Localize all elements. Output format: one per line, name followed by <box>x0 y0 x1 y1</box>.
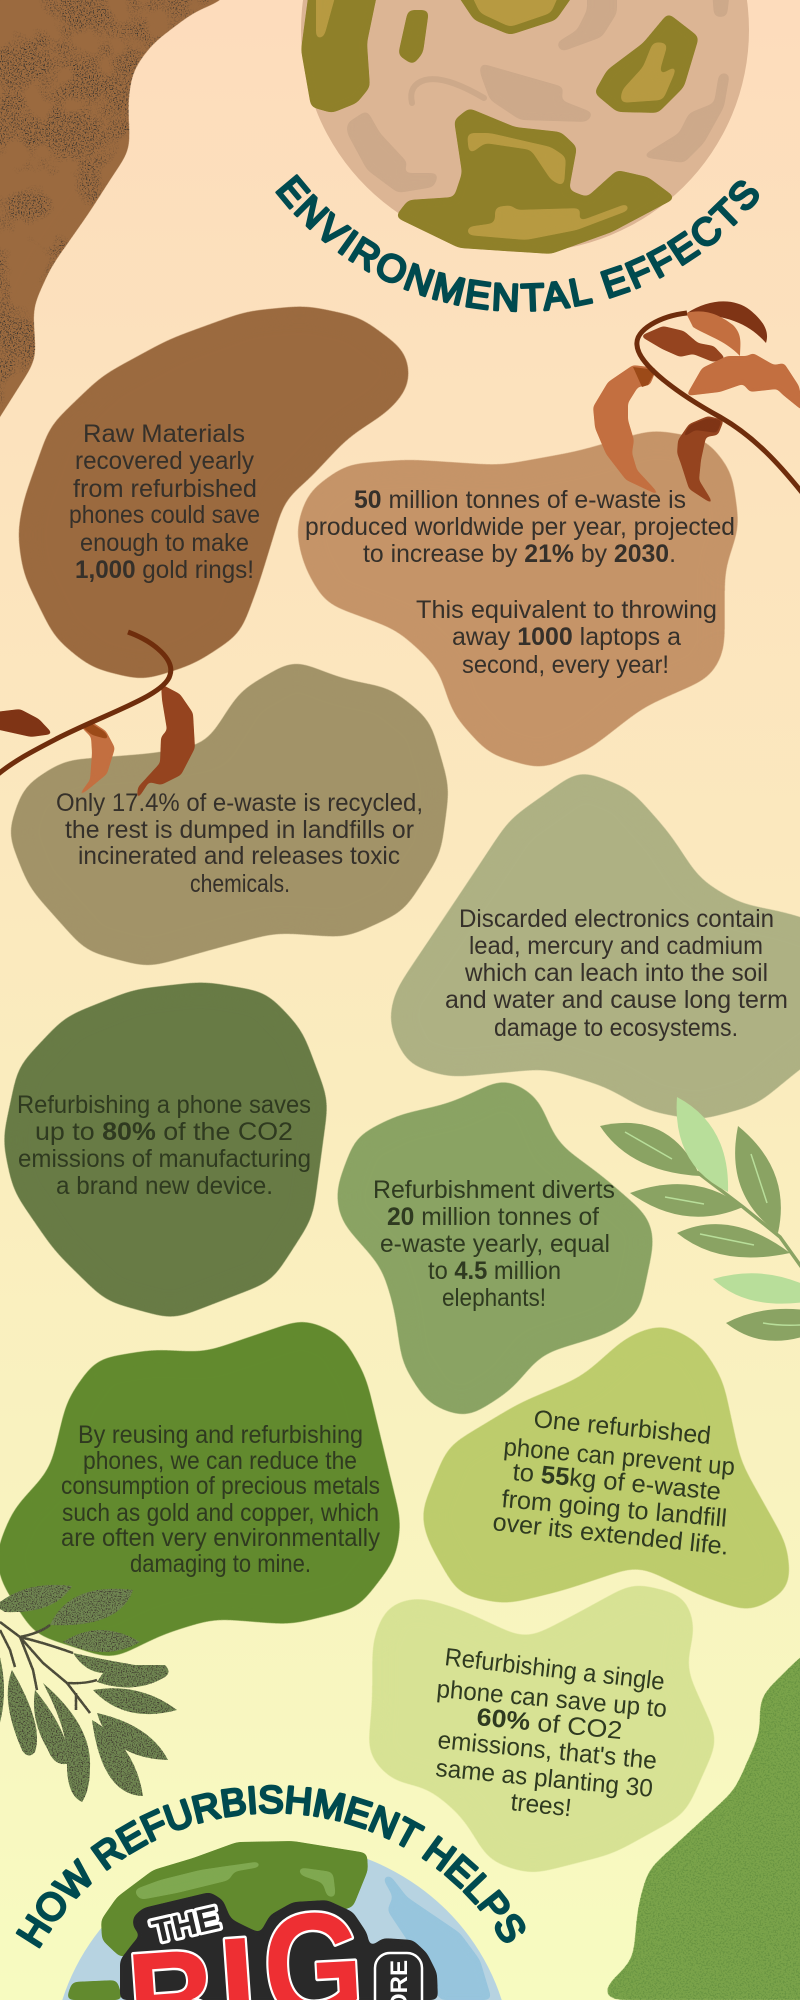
text: raw materials: enough to make <box>80 529 249 557</box>
text: raw materials: recovered yearly <box>75 447 254 475</box>
text: reusing phones: consumption of precious metals <box>61 1472 380 1500</box>
background texture: brown corner top-left <box>0 0 250 480</box>
text: CO2 savings 80%: up to 80% of the CO2 <box>35 1118 293 1146</box>
panel: 55kg of e-waste <box>417 1320 794 1616</box>
text: 55kg of e-waste: phone can prevent up <box>502 1433 736 1481</box>
text: discarded electronics: and water and cause long term <box>445 986 788 1014</box>
text: diverts 20 million tonnes: to 4.5 million <box>428 1257 561 1285</box>
text: diverts 20 million tonnes: elephants! <box>442 1284 546 1312</box>
panel: e-waste produced <box>292 426 743 773</box>
text: discarded electronics: damage to ecosystems. <box>494 1014 738 1042</box>
text: discarded electronics: Discarded electronics contain <box>459 905 774 933</box>
panel: discarded electronics <box>385 766 800 1124</box>
text: diverts 20 million tonnes: Refurbishment diverts <box>373 1176 615 1204</box>
text: 55kg of e-waste: One refurbished <box>532 1405 712 1450</box>
text: discarded electronics <box>445 905 788 1042</box>
text: diverts 20 million tonnes <box>373 1176 615 1312</box>
text: only 17.4% recycled: incinerated and releases toxic <box>78 842 400 870</box>
text: reusing phones: phones, we can reduce the <box>83 1447 357 1475</box>
heading: Environmental Effects: ENVIRONMENTAL EFFECTS <box>275 174 760 312</box>
illustration: bottom planet <box>62 1841 502 2000</box>
text: only 17.4% recycled <box>56 789 423 898</box>
text: CO2 savings 80%: Refurbishing a phone saves <box>17 1091 311 1119</box>
panel: only 17.4% recycled <box>4 656 453 971</box>
text: 60% of CO2: same as planting 30 <box>434 1754 654 1803</box>
text: diverts 20 million tonnes: e-waste yearly, equal <box>380 1230 610 1258</box>
text: 60% of CO2: Refurbishing a single <box>443 1643 666 1696</box>
text: e-waste produced: second, every year! <box>462 651 669 679</box>
text: 55kg of e-waste: from going to landfill <box>500 1485 728 1533</box>
logo: The Big Store <box>120 1879 438 2000</box>
text: raw materials: phones could save <box>69 501 260 529</box>
panel: 60% of CO2 <box>364 1579 722 1878</box>
text: reusing phones: By reusing and refurbishing <box>78 1421 363 1449</box>
text: 60% of CO2: emissions, that's the <box>436 1726 658 1775</box>
heading: How Refurbishment Helps: HOW REFURBISHMENT HELPS <box>16 1784 526 1948</box>
text: reusing phones: such as gold and copper, which <box>62 1499 379 1527</box>
text: e-waste produced: This equivalent to throwing <box>416 596 717 624</box>
logo: The Big Store: THE <box>148 1899 223 1950</box>
text: discarded electronics: which can leach into the soil <box>464 959 768 987</box>
text: CO2 savings 80%: a brand new device. <box>56 1172 273 1200</box>
illustration: top planet <box>301 0 749 254</box>
text: raw materials <box>69 420 260 584</box>
panel: CO2 savings 80% <box>0 978 332 1323</box>
text: CO2 savings 80%: emissions of manufacturing <box>18 1145 311 1173</box>
text: only 17.4% recycled: the rest is dumped in landfills or <box>65 816 414 844</box>
text: 55kg of e-waste: to 55kg of e-waste <box>511 1458 722 1506</box>
text: e-waste produced: away 1000 laptops a <box>452 623 681 651</box>
text: reusing phones: damaging to mine. <box>130 1550 311 1578</box>
text: 60% of CO2: trees! <box>509 1788 573 1822</box>
illustration: brown branch top-right <box>593 301 800 506</box>
text: e-waste produced <box>305 486 735 679</box>
text: reusing phones <box>61 1421 380 1578</box>
text: raw materials: from refurbished <box>73 475 257 503</box>
text: only 17.4% recycled: Only 17.4% of e-waste is recycled, <box>56 789 423 817</box>
text: raw materials: 1,000 gold rings! <box>75 556 254 584</box>
illustration: brown branch left <box>0 632 195 802</box>
text: only 17.4% recycled: chemicals. <box>190 870 290 898</box>
text: 60% of CO2: 60% of CO2 <box>475 1703 623 1745</box>
text: 55kg of e-waste <box>491 1405 736 1561</box>
text: diverts 20 million tonnes: 20 million tonnes of <box>387 1203 599 1231</box>
text: reusing phones: are often very environmentally <box>61 1524 380 1552</box>
text: CO2 savings 80% <box>17 1091 311 1200</box>
text: e-waste produced: 50 million tonnes of e-waste is <box>354 486 686 514</box>
text: 60% of CO2 <box>434 1643 668 1822</box>
text: raw materials: Raw Materials <box>83 420 245 448</box>
panel: raw materials <box>14 302 414 684</box>
illustration: green leaf sprig right <box>600 1097 800 1341</box>
text: discarded electronics: lead, mercury and cadmium <box>469 932 763 960</box>
panel: reusing phones <box>0 1315 405 1663</box>
illustration: olive leaf sprig left <box>0 1585 177 1802</box>
panel: diverts 20 million tonnes <box>332 1074 658 1422</box>
text: 60% of CO2: phone can save up to <box>435 1675 668 1723</box>
text: e-waste produced: to increase by 21% by 2030. <box>363 540 676 568</box>
background texture: green corner bottom-right <box>592 1630 800 2000</box>
text: 55kg of e-waste: over its extended life. <box>491 1508 730 1561</box>
text: e-waste produced: produced worldwide per year, projected <box>305 513 735 541</box>
